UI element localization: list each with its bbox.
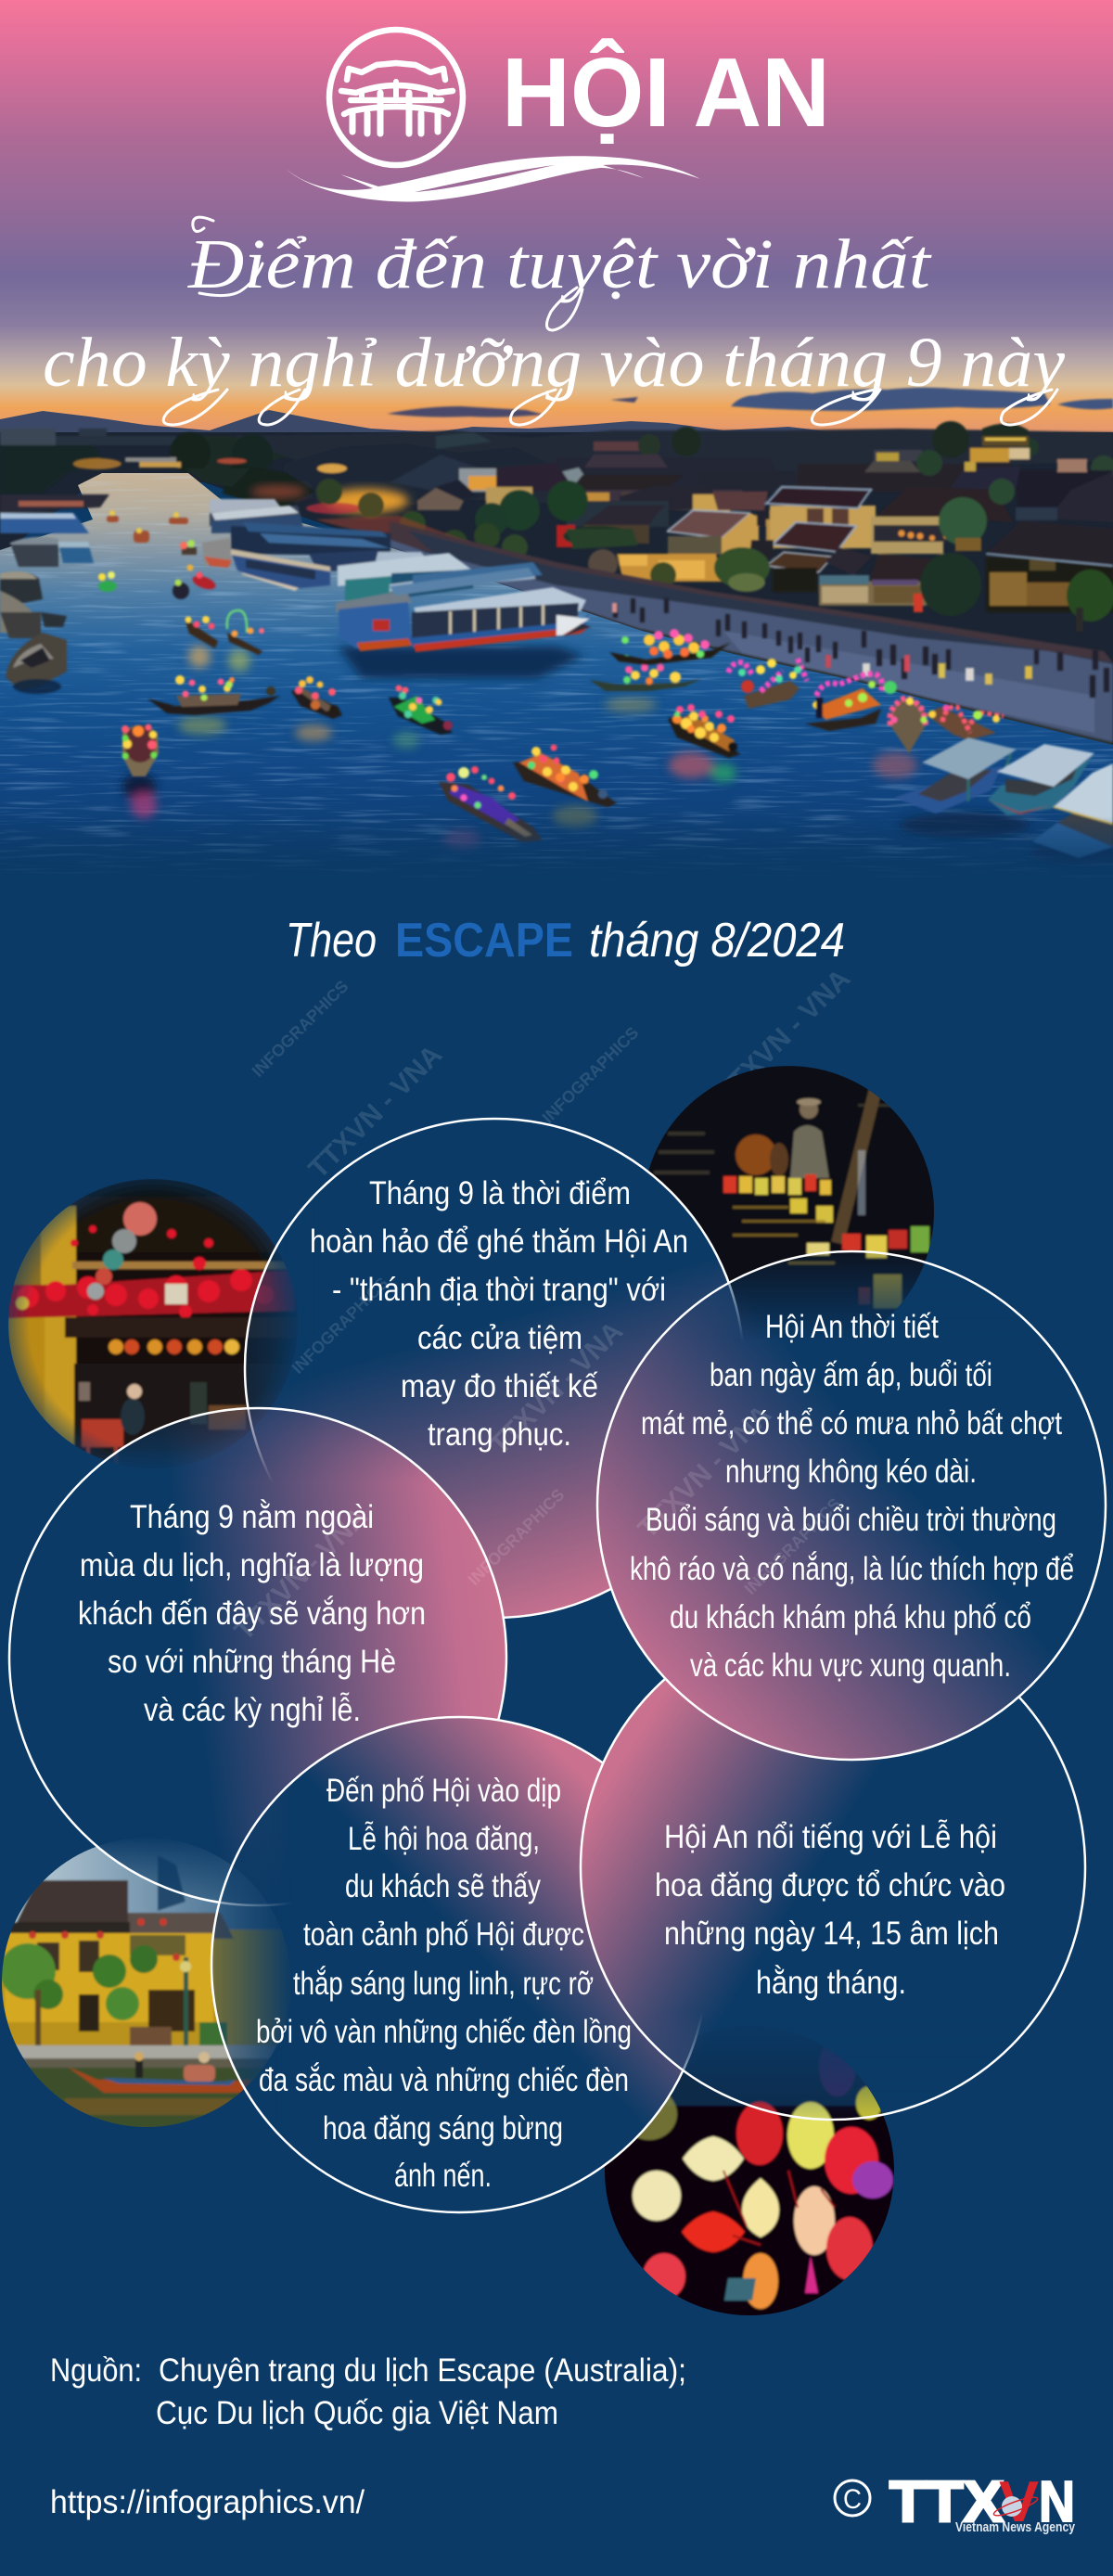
text: lantern festival dates: hoa đăng được tổ chức vào <box>655 1867 1005 1903</box>
text: weather: ban ngày ấm áp, buổi tối <box>710 1357 992 1393</box>
lit tower <box>982 423 1029 440</box>
text: weather: và các khu vực xung quanh. <box>690 1647 1011 1684</box>
watermarks: TTXVN - VNA <box>303 1039 448 1185</box>
panel: circle lantern festival dates <box>579 1679 1087 2121</box>
photo: yellow riverside house <box>0 1837 297 2129</box>
text: lantern festival visit <box>256 1773 632 2194</box>
text: lantern festival dates: những ngày 14, 15 âm lịch <box>664 1916 999 1952</box>
text: lantern festival dates: hằng tháng. <box>756 1965 906 2001</box>
photo: hanging silk lanterns <box>605 2045 894 2315</box>
faint watermarks over circles: TTXVN - VNA <box>633 1399 777 1544</box>
left-side lights and trees <box>73 458 122 469</box>
agency logo: V <box>999 2470 1039 2534</box>
text: perfect time: - "thánh địa thời trang" với <box>332 1272 666 1308</box>
old town rear rooftops <box>284 443 1011 513</box>
panel: circle off season <box>9 1408 506 1905</box>
subtitle: source line: Theo <box>286 914 377 968</box>
bottom fade into navy <box>0 816 1113 881</box>
text: lantern festival visit: bởi vô vàn những chiếc đèn lồng <box>256 2014 632 2050</box>
text: lantern festival dates <box>655 1819 1005 2001</box>
watermarks: INFOGRAPHICS <box>539 1023 642 1127</box>
text: lantern festival visit: ánh nến. <box>394 2158 492 2194</box>
text: lantern festival visit: Lễ hội hoa đăng, <box>348 1821 540 1857</box>
text: lantern festival visit: Đến phố Hội vào dịp <box>326 1773 561 1809</box>
mountains <box>0 410 1113 443</box>
faint watermarks over circles: INFOGRAPHICS <box>741 1494 844 1598</box>
faint watermarks over circles: INFOGRAPHICS <box>465 1485 568 1589</box>
watermarks: INFOGRAPHICS <box>249 977 352 1081</box>
text: perfect time <box>310 1175 688 1453</box>
text: lantern festival visit: du khách sẽ thấy <box>345 1868 541 1904</box>
faint watermarks over circles <box>229 1274 844 1647</box>
agency logo: C <box>843 2484 862 2515</box>
text: lantern festival dates: Hội An nổi tiếng với Lễ hội <box>664 1819 997 1855</box>
text: weather: Hội An thời tiết <box>765 1309 939 1345</box>
text: perfect time: Tháng 9 là thời điểm <box>369 1175 631 1211</box>
text: perfect time: các cửa tiệm <box>417 1320 582 1356</box>
upper river boats left <box>0 494 109 694</box>
photo: house with bougainvillea and lanterns <box>7 1178 300 1475</box>
text: lantern festival visit: hoa đăng sáng bừng <box>323 2110 563 2147</box>
clouds <box>387 388 1113 417</box>
text: off season: Tháng 9 nằm ngoài <box>130 1499 374 1535</box>
covered wooden boats <box>894 737 1113 858</box>
lantern boats <box>98 510 1004 842</box>
subtitle: source line: ESCAPE <box>395 914 573 968</box>
text: off season: khách đến đây sẽ vắng hơn <box>78 1596 426 1632</box>
title <box>43 217 1065 425</box>
text: perfect time: may đo thiết kế <box>401 1368 598 1404</box>
text: off season: và các kỳ nghỉ lễ. <box>144 1692 361 1728</box>
crowd and road glow <box>325 489 408 513</box>
sky gradient <box>0 0 1113 445</box>
text: perfect time: hoàn hảo để ghé thăm Hội An <box>310 1224 688 1260</box>
houses right of the promenade start <box>482 463 575 491</box>
upper-right roofs <box>1011 470 1113 521</box>
text: weather <box>630 1309 1074 1684</box>
agency logo: Vietnam News Agency <box>955 2519 1076 2535</box>
shop fronts and trees along the road <box>617 554 722 582</box>
subtitle: source line <box>286 914 845 968</box>
faint watermarks over circles: TTXVN - VNA <box>229 1501 374 1647</box>
text: perfect time: trang phục. <box>428 1416 571 1453</box>
title: Điểm đến tuyệt vời nhất <box>187 225 932 303</box>
river <box>0 464 1113 881</box>
text: off season <box>78 1499 426 1728</box>
source note: Cục Du lịch Quốc gia Việt Nam <box>156 2395 558 2431</box>
text: weather: du khách khám phá khu phố cổ <box>670 1599 1031 1635</box>
text: lantern festival visit: toàn cảnh phố Hội được <box>303 1916 584 1953</box>
panel: circle perfect time <box>245 1119 744 1618</box>
photo: floating lanterns on river <box>648 1066 934 1332</box>
text: weather: nhưng không kéo dài. <box>725 1454 977 1490</box>
road and promenade <box>371 521 1113 745</box>
crowd on promenade <box>612 598 1109 698</box>
distant buildings and trees <box>0 421 1113 506</box>
agency logo: TTX <box>889 2470 1004 2534</box>
agency logo <box>835 2470 1076 2535</box>
town base <box>0 432 1113 752</box>
logo wave <box>286 156 700 202</box>
logo wordmark: HỘI AN <box>502 38 830 147</box>
hero photo: Hoi An river at dusk <box>0 0 1113 881</box>
watermarks <box>249 963 856 1185</box>
faint watermarks over circles: INFOGRAPHICS <box>288 1274 391 1378</box>
moored tour boats <box>202 499 591 652</box>
watermarks: TTXVN - VNA <box>711 963 856 1109</box>
panel: circle weather <box>597 1251 1106 1760</box>
text: off season: mùa du lịch, nghĩa là lượng <box>80 1547 424 1583</box>
logo: Hoi An emblem <box>329 30 463 165</box>
subtitle: source line: tháng 8/2024 <box>589 914 845 968</box>
boat reflections <box>122 646 1113 866</box>
website url: https://infographics.vn/ <box>50 2484 365 2520</box>
text: off season: so với những tháng Hè <box>108 1644 396 1680</box>
text: lantern festival visit: thắp sáng lung linh, rực rỡ <box>293 1966 594 2002</box>
faint watermarks over circles: TTXVN - VNA <box>484 1315 629 1461</box>
front houses <box>567 501 669 527</box>
source note: Chuyên trang du lịch Escape (Australia); <box>159 2352 686 2389</box>
text: lantern festival visit: đa sắc màu và những chiếc đèn <box>259 2062 629 2098</box>
agency logo: N <box>1039 2470 1075 2534</box>
source note: Nguồn: <box>50 2352 142 2389</box>
title: cho kỳ nghỉ dưỡng vào tháng 9 này <box>43 324 1065 402</box>
source note <box>50 2352 686 2431</box>
big roof lower right <box>986 557 1113 612</box>
panel: circle lantern festival visit <box>211 1717 707 2212</box>
